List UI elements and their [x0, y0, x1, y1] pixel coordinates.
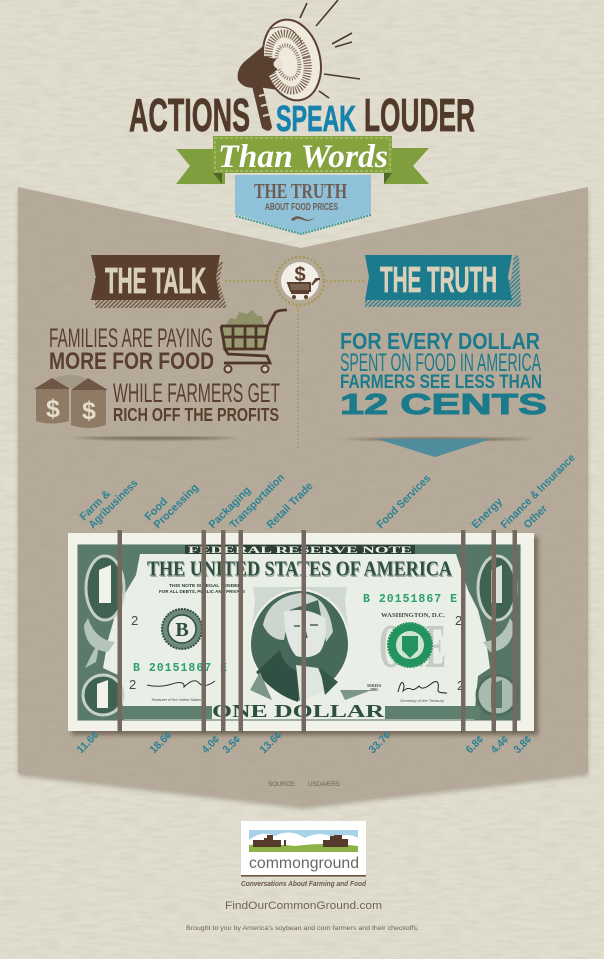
bill: United States of America: THE UNITED STATES OF AMERICA — [148, 558, 454, 582]
blue tag: The Truth about food prices — [235, 175, 371, 234]
bill: Federal Reserve Note — [185, 545, 415, 556]
source line: USDA/ERS — [308, 781, 341, 788]
text block: the truth — [340, 328, 547, 421]
title: Actions Speak Louder: LOUDER — [364, 89, 475, 141]
cost values: 33.7¢ — [367, 729, 394, 756]
title: Actions Speak Louder: ACTIONS — [129, 89, 250, 141]
bill: B seal: B — [175, 619, 189, 641]
bill: right ornaments — [415, 545, 520, 720]
text block: the talk claims: FAMILIES ARE PAYING — [49, 323, 213, 353]
bill: Federal Reserve Note: FEDERAL RESERVE NOTE — [188, 546, 412, 556]
banner: The Talk: THE TALK — [105, 260, 206, 301]
rotated category labels: Processing — [152, 482, 201, 531]
bill: Treasury seal — [388, 623, 432, 667]
tagline: Conversations About Farming and Food — [241, 881, 367, 888]
cost values: 13.6¢ — [258, 729, 285, 756]
text block: the talk claims: MORE FOR FOOD — [49, 348, 214, 375]
cost values — [75, 729, 534, 756]
bill: legal tender text: THIS NOTE IS LEGAL TENDER — [169, 583, 242, 588]
bill: United States of America: THE UNITED STATES OF AMERICA — [147, 556, 453, 580]
text block: the talk claims: WHILE FARMERS GET — [113, 378, 280, 408]
title: Actions Speak Louder: SPEAK — [276, 98, 356, 139]
cost values: 3.5¢ — [221, 733, 243, 756]
teal arrow — [377, 439, 491, 457]
text block: the truth: FARMERS SEE LESS THAN — [340, 372, 542, 393]
bill: series and signatures: 2001 — [370, 687, 378, 692]
rotated category labels: Finance & Insurance — [499, 452, 578, 531]
icon: grain silos with dollar signs: $ — [82, 397, 96, 425]
bill: series and signatures — [147, 681, 447, 703]
cost values: 4.0¢ — [200, 733, 222, 756]
rotated category labels: Packaging — [207, 484, 253, 531]
rotated category labels: Retail Trade — [265, 480, 316, 531]
green ribbon: Than Words — [176, 136, 429, 184]
rotated category labels: Energy — [470, 495, 506, 531]
text block: the talk claims: RICH OFF THE PROFITS — [113, 405, 279, 425]
rotated category labels: Agribusiness — [87, 477, 140, 531]
source line — [268, 781, 341, 788]
banner: The Truth: THE TRUTH — [380, 259, 497, 300]
bill: serial numbers: B 20151867 E — [363, 593, 457, 606]
dollar bill: ONE — [379, 613, 446, 681]
bill: plate digits: 2 — [129, 677, 136, 692]
bill: plate digits: 2 — [455, 613, 462, 628]
blue tag: The Truth about food prices: ABOUT FOOD PRICES — [265, 201, 338, 213]
rotated category labels: Food — [143, 496, 170, 523]
icon: grain silos with dollar signs: $ — [46, 395, 60, 423]
commonground logo: commonground — [249, 855, 359, 872]
green ribbon: Than Words: Than Words — [218, 139, 388, 175]
bill: series and signatures: SERIES — [367, 683, 382, 688]
commonground logo — [241, 821, 366, 877]
bill: plate digits: 2 — [131, 613, 138, 628]
megaphone icon — [238, 0, 360, 131]
cost values: 3.8¢ — [512, 733, 534, 756]
bill: series and signatures: Secretary of the Treasury — [400, 698, 445, 703]
bill: legal tender text: FOR ALL DEBTS, PUBLIC AND PRIVATE — [159, 589, 245, 594]
icon: grain silos with dollar signs — [34, 375, 108, 428]
cost values: 6.8¢ — [464, 733, 486, 756]
bill: slice gaps — [118, 530, 517, 733]
bill: left ornaments — [78, 545, 186, 720]
megaphone sound rays — [300, 0, 360, 98]
bill: serial numbers: B 20151867 E — [133, 662, 227, 675]
dollar bill — [68, 530, 538, 735]
bill: plate digits: 2 — [457, 678, 464, 693]
banner: The Talk — [91, 255, 227, 308]
text block: the talk claims — [49, 323, 280, 425]
source line: SOURCE: — [268, 781, 296, 788]
cost values: 18.6¢ — [148, 729, 175, 756]
banner: The Truth — [365, 255, 521, 307]
rotated category labels: Transportation — [228, 472, 287, 531]
website URL: FindOurCommonGround.com — [225, 900, 382, 912]
rotated category labels: Food Services — [375, 472, 433, 531]
rotated category labels: Farm & — [78, 488, 113, 523]
bill: serial numbers — [133, 593, 457, 675]
title: Actions Speak Louder — [129, 89, 475, 141]
bill: plate digits — [129, 613, 464, 693]
icon: shopping cart full of money — [221, 310, 287, 372]
dotted connector lines — [225, 281, 366, 450]
bill: bottom band — [122, 706, 480, 719]
blue tag: The Truth about food prices: THE TRUTH — [254, 179, 347, 203]
bill: portrait of Washington — [250, 587, 372, 703]
bill: series and signatures: Treasurer of the United States — [151, 697, 201, 702]
cost values: 11.6¢ — [75, 729, 102, 756]
text block: the truth: 12 CENTS — [340, 389, 547, 421]
credit line: Brought to you by America's soybean and corn farmers and their checkoffs. — [186, 925, 419, 932]
bill: legal tender text — [159, 583, 245, 594]
bill: B seal — [162, 609, 202, 649]
shadow lines below text — [72, 436, 535, 441]
badge: shopping cart with dollar sign: $ — [294, 264, 306, 286]
cost values: 4.4¢ — [489, 733, 511, 756]
bill: Washington D.C.: WASHINGTON, D.C. — [381, 612, 445, 619]
rotated category labels — [78, 452, 578, 531]
text block: the truth: FOR EVERY DOLLAR — [340, 328, 540, 354]
panel: main taupe chevron panel — [18, 187, 588, 809]
rotated category labels: Other — [522, 502, 550, 531]
bill: One Dollar: ONE DOLLAR — [212, 701, 385, 721]
badge: shopping cart with dollar sign — [276, 257, 324, 305]
